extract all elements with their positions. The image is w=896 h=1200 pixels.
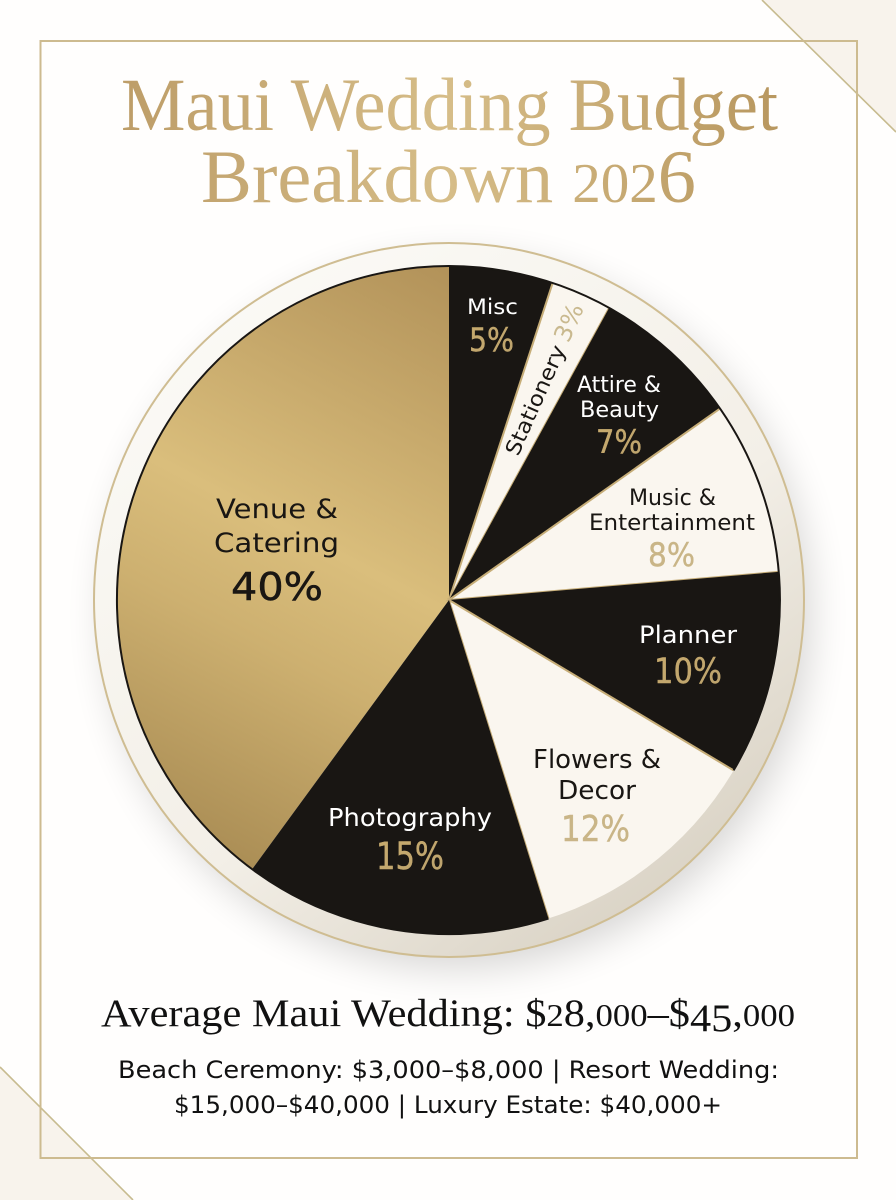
label: music and entertainment: 8% <box>648 536 695 574</box>
label: flowers and decor <box>533 745 661 850</box>
label: attire and beauty <box>577 373 661 461</box>
slice: attire and beauty 7% <box>450 308 719 598</box>
label: attire and beauty: Attire & <box>577 373 661 398</box>
title: Breakdown 2026 <box>201 136 696 219</box>
outer ring <box>94 243 804 957</box>
label: photography <box>328 803 492 878</box>
decorative corner: top right <box>762 0 896 132</box>
slice: photography 15% <box>252 600 548 934</box>
pie outline <box>117 266 780 934</box>
pie chart <box>90 200 843 980</box>
label: misc <box>467 295 518 359</box>
label: stationery <box>498 299 590 459</box>
label: misc: 5% <box>469 321 514 359</box>
slice: misc 5% <box>449 267 552 597</box>
slices <box>118 267 779 934</box>
slice: planner 10% <box>450 572 779 769</box>
label: venue and catering: Venue & <box>216 494 338 525</box>
label: planner: 10% <box>654 652 722 692</box>
average cost headline: , <box>732 992 743 1035</box>
label: planner: Planner <box>639 621 737 649</box>
title <box>121 64 778 219</box>
label: attire and beauty: 7% <box>596 423 642 461</box>
label: stationery: 3% <box>548 299 590 346</box>
average cost headline: Average Maui Wedding: $ 28,000–$ <box>101 992 687 1035</box>
venue type price ranges: Beach Ceremony: $3,000–$8,000 | Resort Wedding: <box>118 1056 779 1084</box>
label: music and entertainment <box>589 486 755 574</box>
venue type price ranges: $15,000–$40,000 | Luxury Estate: $40,000+ <box>174 1091 722 1119</box>
slice: music and entertainment 8% <box>446 408 778 601</box>
label: stationery: Stationery <box>501 341 571 459</box>
average cost headline: 45 <box>690 997 732 1040</box>
label: flowers and decor: Decor <box>558 776 636 806</box>
label: venue and catering <box>214 494 339 609</box>
label: attire and beauty: Beauty <box>580 398 659 423</box>
label: photography: Photography <box>328 803 492 832</box>
title: Maui Wedding Budget <box>121 64 778 147</box>
venue type price ranges <box>118 1056 779 1119</box>
slice: stationery 3% <box>448 284 609 599</box>
label: flowers and decor: Flowers & <box>533 745 661 775</box>
label: music and entertainment: Music & <box>629 486 716 511</box>
ring shadow <box>106 260 810 968</box>
label: photography: 15% <box>376 835 444 878</box>
slice: flowers and decor 12% <box>448 598 734 918</box>
label: misc: Misc <box>467 295 518 319</box>
label: venue and catering: 40% <box>231 565 323 609</box>
label: flowers and decor: 12% <box>561 809 630 850</box>
decorative corner: bottom left <box>0 1067 133 1200</box>
slice: venue and catering 40% <box>118 267 449 868</box>
label: planner <box>639 621 737 692</box>
average cost headline: 000 <box>743 997 795 1033</box>
label: venue and catering: Catering <box>214 528 339 559</box>
label: music and entertainment: Entertainment <box>589 511 755 536</box>
